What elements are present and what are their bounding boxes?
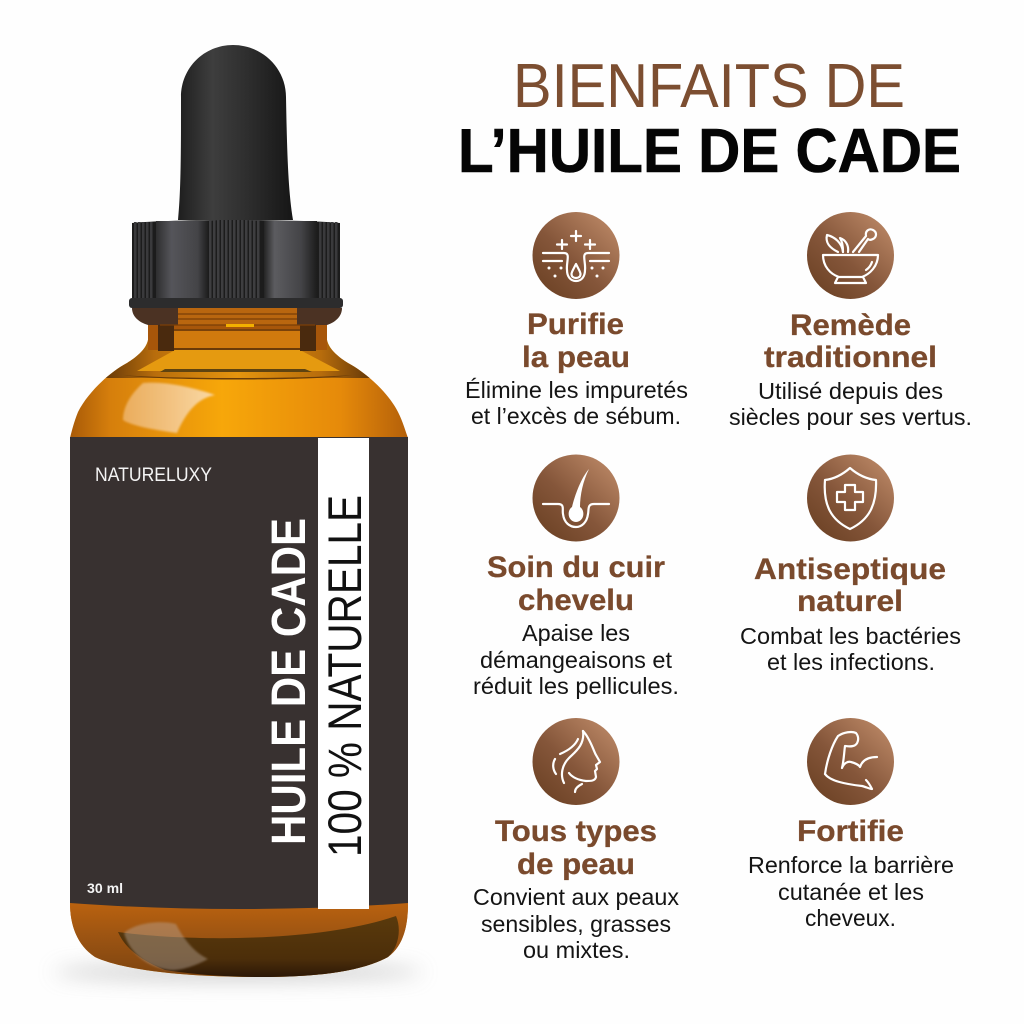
title line 1: BIENFAITS DE xyxy=(513,52,905,121)
description: Convient aux peaux xyxy=(473,884,679,910)
inner neck stripes xyxy=(160,314,315,325)
description: ou mixtes. xyxy=(523,937,630,963)
base dark liquid xyxy=(118,916,399,977)
neck inner xyxy=(174,331,300,349)
panel: remède traditionnel xyxy=(729,212,972,430)
description xyxy=(729,378,972,430)
heading: traditionnel xyxy=(764,341,937,374)
heading: Purifie xyxy=(527,308,624,341)
shoulder and glass details xyxy=(100,325,375,380)
description: et les infections. xyxy=(767,649,935,675)
icon: shield with cross xyxy=(807,454,894,542)
inner neck xyxy=(178,308,297,325)
heading: Remède xyxy=(790,309,911,342)
description: Apaise les xyxy=(522,620,630,646)
upper neck glass xyxy=(132,308,342,325)
collar xyxy=(129,298,343,308)
panel: fortifie xyxy=(748,718,954,931)
description xyxy=(740,623,961,675)
reflection xyxy=(123,383,215,433)
description: siècles pour ses vertus. xyxy=(729,404,972,430)
shoulder shading xyxy=(100,340,375,378)
heading: de peau xyxy=(517,848,635,881)
cap ridges centre xyxy=(209,220,260,298)
title xyxy=(458,52,961,186)
description xyxy=(473,884,679,963)
white band xyxy=(318,438,369,909)
volume: 30 ml xyxy=(87,881,123,896)
description: et l’excès de sébum. xyxy=(471,403,681,429)
glass body xyxy=(70,325,408,977)
dark strip xyxy=(160,369,312,372)
neck dark left xyxy=(158,325,174,351)
description: Renforce la barrière xyxy=(748,852,954,878)
heading: Fortifie xyxy=(797,815,904,848)
description: cutanée et les xyxy=(778,879,924,905)
heading xyxy=(495,815,657,881)
bottle shadow xyxy=(53,964,423,980)
natural claim: 100 % NATURELLE xyxy=(318,495,371,857)
description: Utilisé depuis des xyxy=(758,378,943,404)
heading: Tous types xyxy=(495,815,657,848)
neck inner bottom line xyxy=(174,348,300,350)
description: réduit les pellicules. xyxy=(473,673,679,699)
heading: chevelu xyxy=(518,584,634,617)
description: démangeaisons et xyxy=(480,647,673,673)
bottle xyxy=(53,45,423,980)
heading xyxy=(522,308,630,374)
description: sensibles, grasses xyxy=(481,911,671,937)
neck inner top line xyxy=(174,329,300,331)
heading xyxy=(754,553,946,618)
cap panel right xyxy=(264,221,317,298)
description xyxy=(465,377,688,429)
description xyxy=(748,852,954,931)
description: Élimine les impuretés xyxy=(465,377,688,403)
heading: Soin du cuir xyxy=(487,551,665,584)
panel: tous types de peau xyxy=(473,718,679,963)
neck dark right xyxy=(300,325,316,351)
icon: hair follicle xyxy=(532,454,620,542)
label xyxy=(70,437,408,909)
cap ridges left xyxy=(134,222,152,298)
heading: naturel xyxy=(797,585,903,618)
title line 2: L’HUILE DE CADE xyxy=(458,117,961,186)
icon: mortar and pestle xyxy=(807,212,894,299)
neck outer glass xyxy=(148,325,327,350)
description: Combat les bactéries xyxy=(740,623,961,649)
dark shoulder band xyxy=(123,375,352,380)
icon: flexed arm xyxy=(807,718,894,805)
cap panel left xyxy=(156,221,208,298)
cap xyxy=(132,220,340,298)
icon: skin pore xyxy=(532,212,620,299)
base reflection xyxy=(124,922,208,970)
dropper bulb xyxy=(178,45,293,220)
description: cheveux. xyxy=(805,905,896,931)
brand: NATURELUXY xyxy=(95,464,212,486)
heading: la peau xyxy=(522,341,630,374)
panel: purifie la peau xyxy=(465,212,688,429)
neck highlight xyxy=(226,324,254,327)
heading xyxy=(764,309,937,374)
panel: antiseptique naturel xyxy=(740,454,961,675)
base glass xyxy=(70,903,408,977)
cap ridges right xyxy=(319,222,338,298)
description xyxy=(473,620,679,699)
heading xyxy=(487,551,665,617)
panel: soin du cuir chevelu xyxy=(473,454,679,699)
heading: Antiseptique xyxy=(754,553,946,586)
product name: HUILE DE CADE xyxy=(263,518,316,845)
shoulder light trapezoid xyxy=(137,350,340,371)
icon: woman profile xyxy=(532,718,620,805)
